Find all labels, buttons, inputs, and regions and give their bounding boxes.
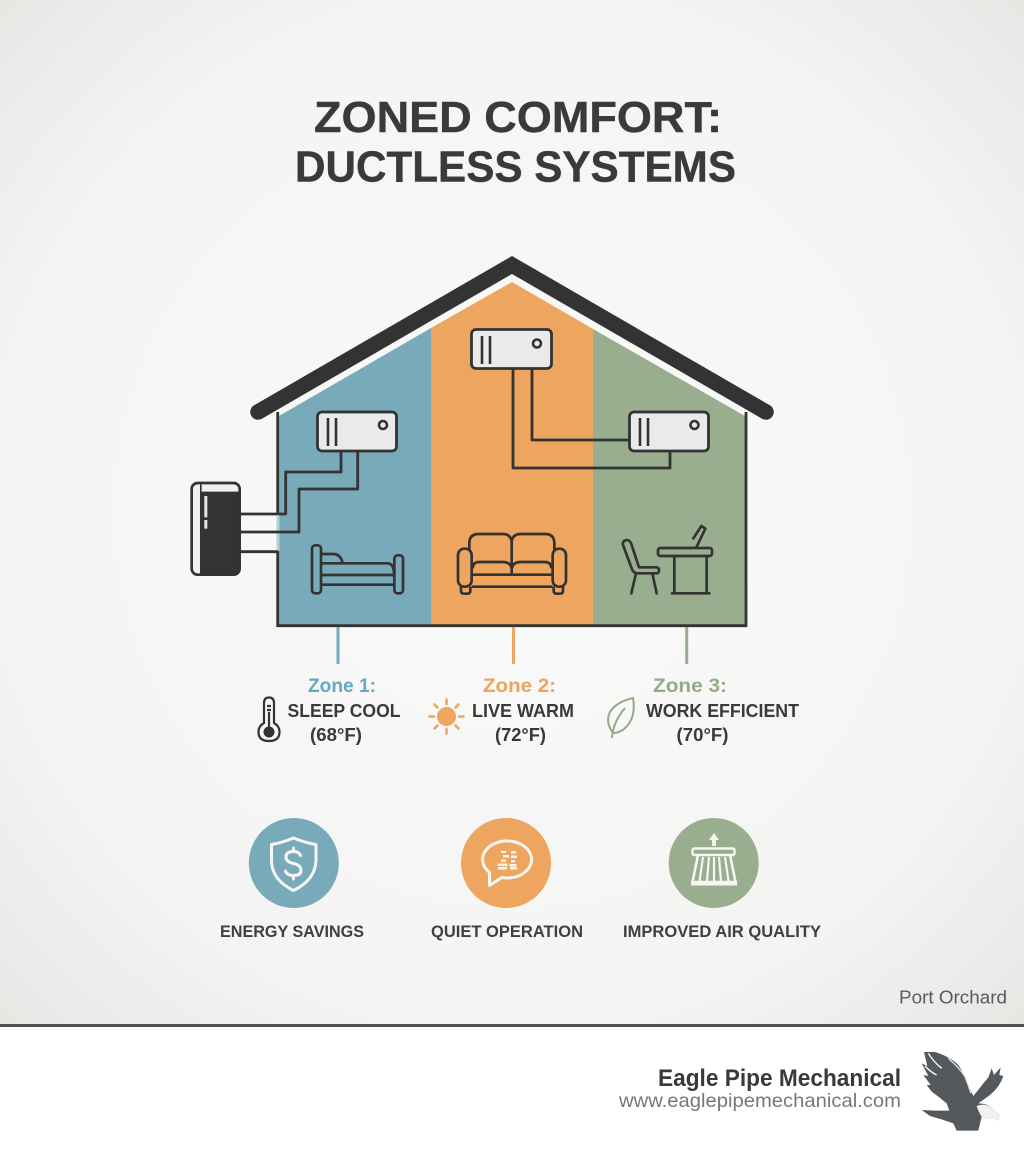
zone 1 label [258,675,400,745]
zone 1 label: SLEEP COOL [288,701,400,721]
zone 3 label: (70°F) [676,725,729,745]
icon: thermometer [258,698,280,741]
roof [258,265,766,412]
indoor unit zone 1 [318,412,396,451]
icon: leaf [608,698,634,738]
zone 3 label [608,675,799,745]
zone 1 fill [279,328,431,625]
footer divider [0,1024,1024,1027]
zone 2 label: LIVE WARM [472,701,574,721]
eagle logo [922,1052,1003,1131]
benefit: improved air quality [623,818,821,941]
title: DUCTLESS SYSTEMS [295,142,736,192]
connector lines [338,627,687,664]
company name: Eagle Pipe Mechanical [658,1065,901,1092]
icon: desk and chair [623,526,712,593]
refrigerant lines [240,369,670,552]
icon: shield with dollar [272,838,316,890]
wall gap [276,516,280,551]
zone 1 label: (68°F) [310,725,362,745]
title [295,93,736,192]
icon: bed [312,545,403,593]
zone 3 label: Zone 3: [653,675,727,697]
zone 3 fill [593,329,745,625]
icon: air filter [691,833,737,886]
icon: speech bubble [483,841,532,886]
house diagram [192,265,766,626]
zone 2 label: (72°F) [495,725,546,745]
zone 2 label [430,675,574,745]
location label: Port Orchard [899,988,1007,1008]
icon: sofa [458,534,566,594]
footer panel [0,1027,1024,1154]
benefit: improved air quality: IMPROVED AIR QUALITY [623,923,821,941]
zone 2 label: Zone 2: [483,675,556,697]
zone 3 label: WORK EFFICIENT [646,701,799,721]
outdoor unit [192,483,240,575]
icon: sun [430,700,464,734]
title: ZONED COMFORT: [314,93,722,142]
benefit: quiet operation: QUIET OPERATION [431,923,583,941]
indoor unit zone 2 [472,330,552,368]
benefit: quiet operation [431,818,583,941]
website: www.eaglepipemechanical.com [618,1090,901,1112]
benefit: energy savings: ENERGY SAVINGS [220,923,364,941]
indoor unit zone 3 [630,412,708,451]
zone 1 label: Zone 1: [308,675,376,697]
zone 2 fill [431,282,593,625]
house walls [278,412,746,626]
benefit: energy savings [220,818,364,941]
